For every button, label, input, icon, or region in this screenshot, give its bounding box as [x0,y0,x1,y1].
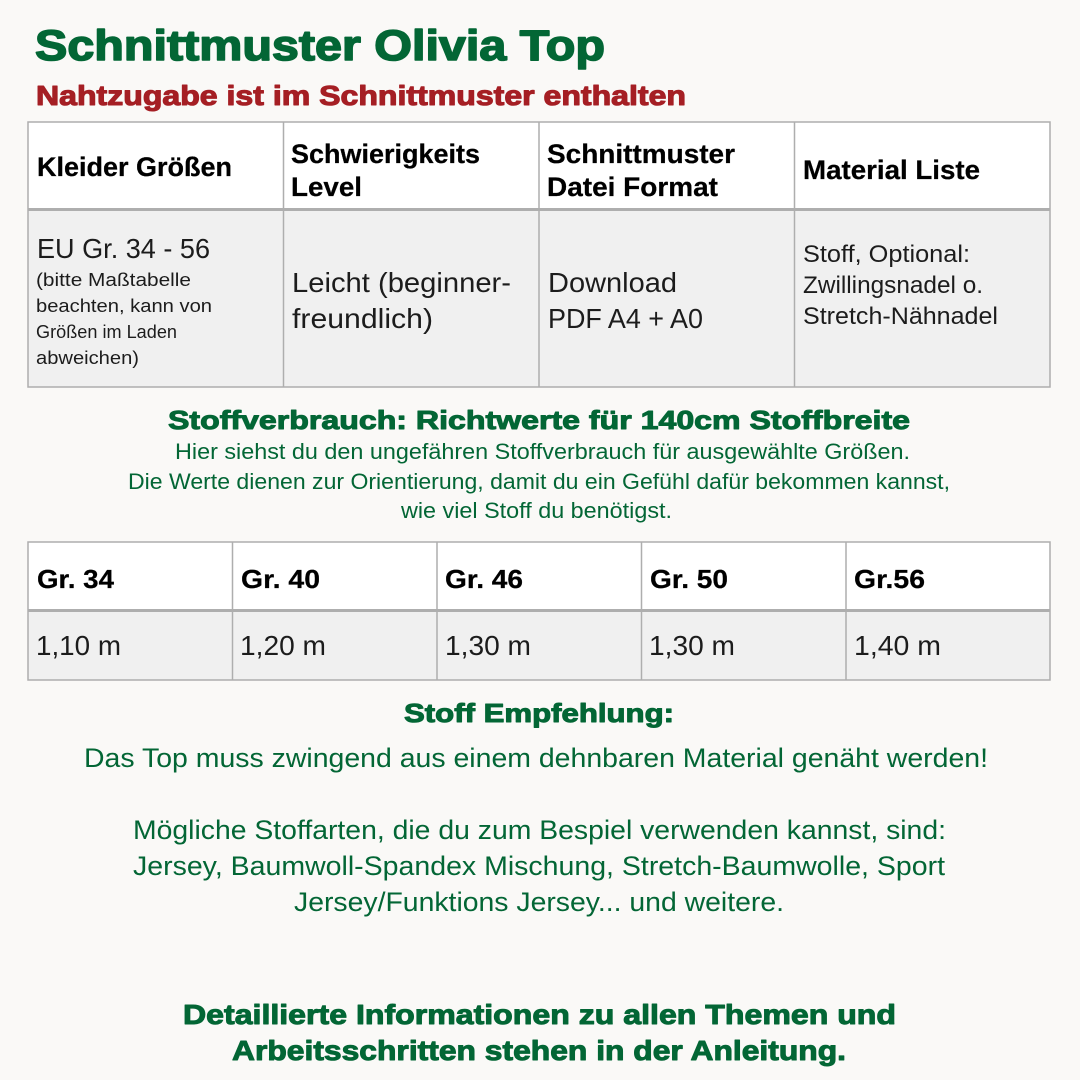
size headers [37,564,925,594]
text block: possible fabric types [133,815,946,917]
text block: fabric consumption intro: wie viel Stoff du benötigst. [400,498,672,523]
cell: difficulty [292,267,511,334]
cell: file format: PDF A4 + A0 [548,303,703,334]
cell: file format: Download [548,267,677,298]
table header: materials: Material Liste [803,155,980,185]
table header: file format: Datei Format [547,172,718,202]
text block: fabric consumption intro [128,439,950,523]
table header: sizes: Kleider Größen [37,152,232,182]
size headers: Gr.56 [854,564,925,594]
closing note [183,999,896,1066]
size headers: Gr. 46 [445,564,523,594]
table header: difficulty [291,139,480,202]
panel: pattern info table [28,122,1050,387]
cell: sizes: beachten, kann von [36,296,212,316]
text block: stretch material requirement: Das Top muss zwingend aus einem dehnbaren Material genäht werden! [84,743,988,773]
text block: possible fabric types: Jersey/Funktions Jersey... und weitere. [294,887,784,917]
cell: sizes: (bitte Maßtabelle [36,270,191,290]
cell: sizes [36,233,212,368]
cell: materials: Zwillingsnadel o. [803,272,983,299]
size headers: Gr. 50 [650,564,728,594]
panel: fabric consumption table [28,542,1050,680]
fabric length values: 1,30 m [649,630,735,661]
cell: difficulty: Leicht (beginner- [292,267,511,298]
cell: sizes: EU Gr. 34 - 56 [37,233,210,264]
title: Schnittmuster Olivia Top [35,22,605,70]
cell: difficulty: freundlich) [292,303,433,334]
heading: fabric recommendation: Stoff Empfehlung: [404,698,674,728]
cell: sizes: Größen im Laden [36,322,177,342]
subtitle: seam allowance note: Nahtzugabe ist im Schnittmuster enthalten [36,80,686,111]
table header: difficulty: Schwierigkeits [291,139,480,169]
fabric length values: 1,20 m [240,630,326,661]
fabric length values: 1,10 m [36,630,121,661]
cell: materials [803,241,998,330]
text block: fabric consumption intro: Hier siehst du den ungefähren Stoffverbrauch für ausgewählte Größen. [175,439,910,464]
size headers: Gr. 34 [37,564,115,594]
cell: sizes: abweichen) [36,348,139,368]
cell: file format [548,267,703,334]
table header: file format: Schnittmuster [547,139,736,169]
fabric length values [36,630,941,661]
cell: materials: Stoff, Optional: [803,241,970,268]
table header: difficulty: Level [291,172,362,202]
cell: materials: Stretch-Nähnadel [803,303,998,330]
closing note: Detaillierte Informationen zu allen Themen und [183,999,896,1030]
text block: possible fabric types: Mögliche Stoffarten, die du zum Bespiel verwenden kannst, sind: [133,815,946,845]
text block: possible fabric types: Jersey, Baumwoll-Spandex Mischung, Stretch-Baumwolle, Sport [133,851,946,881]
text block: fabric consumption intro: Die Werte dienen zur Orientierung, damit du ein Gefühl dafür bekommen kannst, [128,469,950,494]
fabric length values: 1,40 m [854,630,941,661]
table header: file format [547,139,736,202]
closing note: Arbeitsschritten stehen in der Anleitung. [232,1035,846,1066]
heading: fabric consumption: Stoffverbrauch: Richtwerte für 140cm Stoffbreite [168,405,910,435]
fabric length values: 1,30 m [445,630,531,661]
size headers: Gr. 40 [241,564,320,594]
